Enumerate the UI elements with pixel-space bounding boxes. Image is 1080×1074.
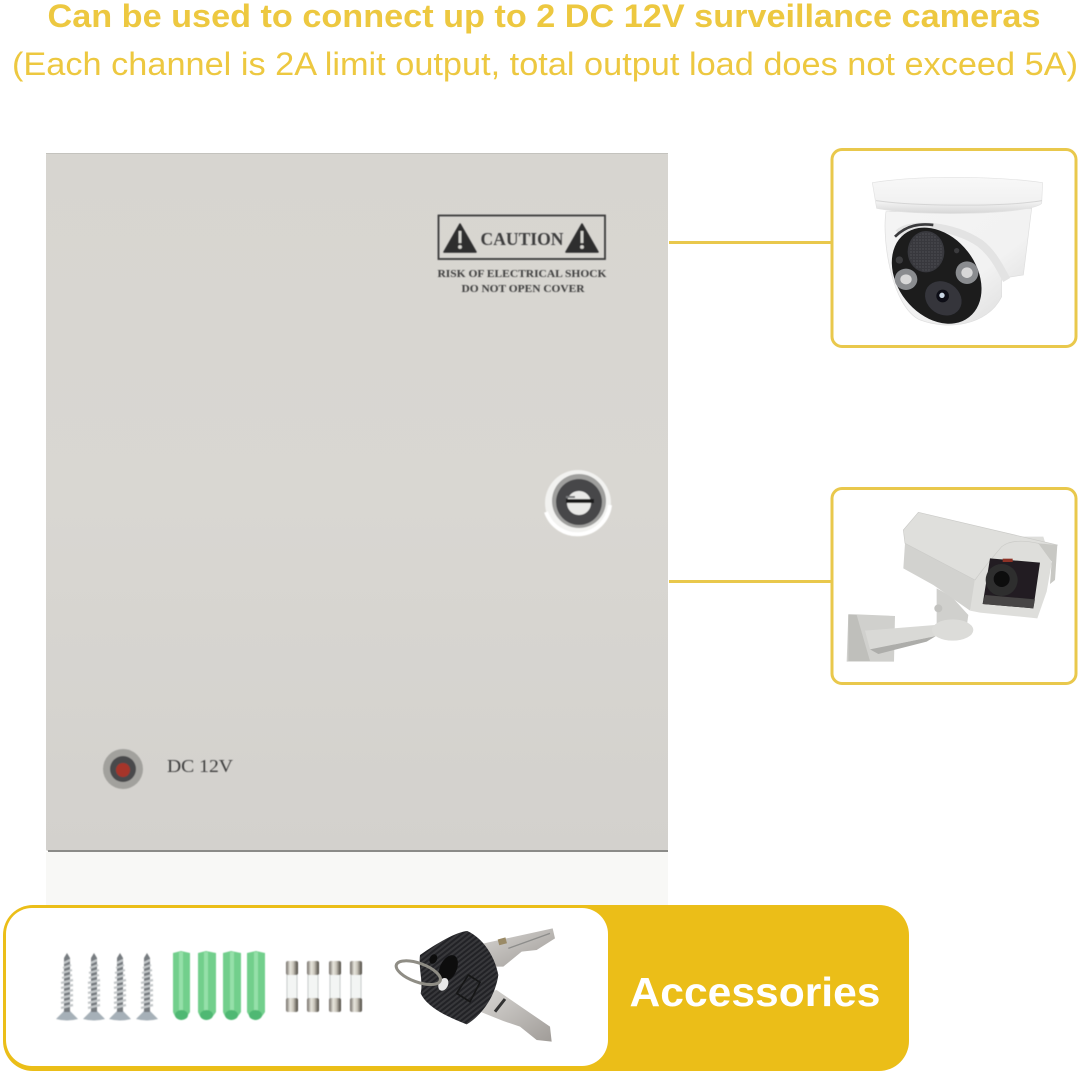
icon: bullet camera: [847, 512, 1057, 662]
lock: [545, 470, 611, 536]
connector: cabinet to dome camera: [669, 241, 832, 244]
caution text: CAUTION: [480, 229, 564, 249]
card frame: [832, 488, 1076, 684]
sun shield: [903, 512, 1057, 580]
accessories tray: [6, 908, 608, 1066]
warning text: RISK OF ELECTRICAL SHOCK: [438, 269, 607, 280]
subheading: (Each channel is 2A limit output, total output load does not exceed 5A): [12, 46, 1078, 82]
connector: cabinet to bullet camera: [669, 580, 832, 583]
cabinet door: [46, 153, 668, 851]
panel: power supply cabinet: [46, 153, 668, 905]
accessories label: Accessories: [630, 969, 880, 1015]
caution label: [438, 216, 607, 295]
power indicator light: [103, 749, 143, 789]
icon: glass fuses: [286, 961, 362, 1012]
wall mount: [847, 614, 895, 662]
panel: bullet camera: [832, 488, 1076, 684]
housing body: [903, 543, 978, 611]
title: [12, 0, 1078, 82]
icon: warning triangle left: [444, 224, 476, 252]
side flap: [1038, 543, 1057, 584]
icon: screws: [56, 953, 158, 1020]
icon: dome camera: [872, 177, 1043, 341]
caution label: DO NOT OPEN COVER: [462, 284, 585, 295]
camera face: [983, 558, 1040, 608]
cabinet reflection: [46, 852, 668, 905]
icon: keys: [393, 928, 555, 1042]
card frame: [832, 150, 1076, 346]
front frame: [970, 537, 1052, 618]
icon: warning triangle right: [566, 224, 598, 252]
voltage label: DC 12V: [167, 756, 233, 776]
panel: dome camera: [832, 150, 1076, 346]
accessories background: [3, 905, 909, 1071]
panel: accessories: [3, 905, 909, 1071]
icon: wall anchors: [173, 951, 265, 1020]
